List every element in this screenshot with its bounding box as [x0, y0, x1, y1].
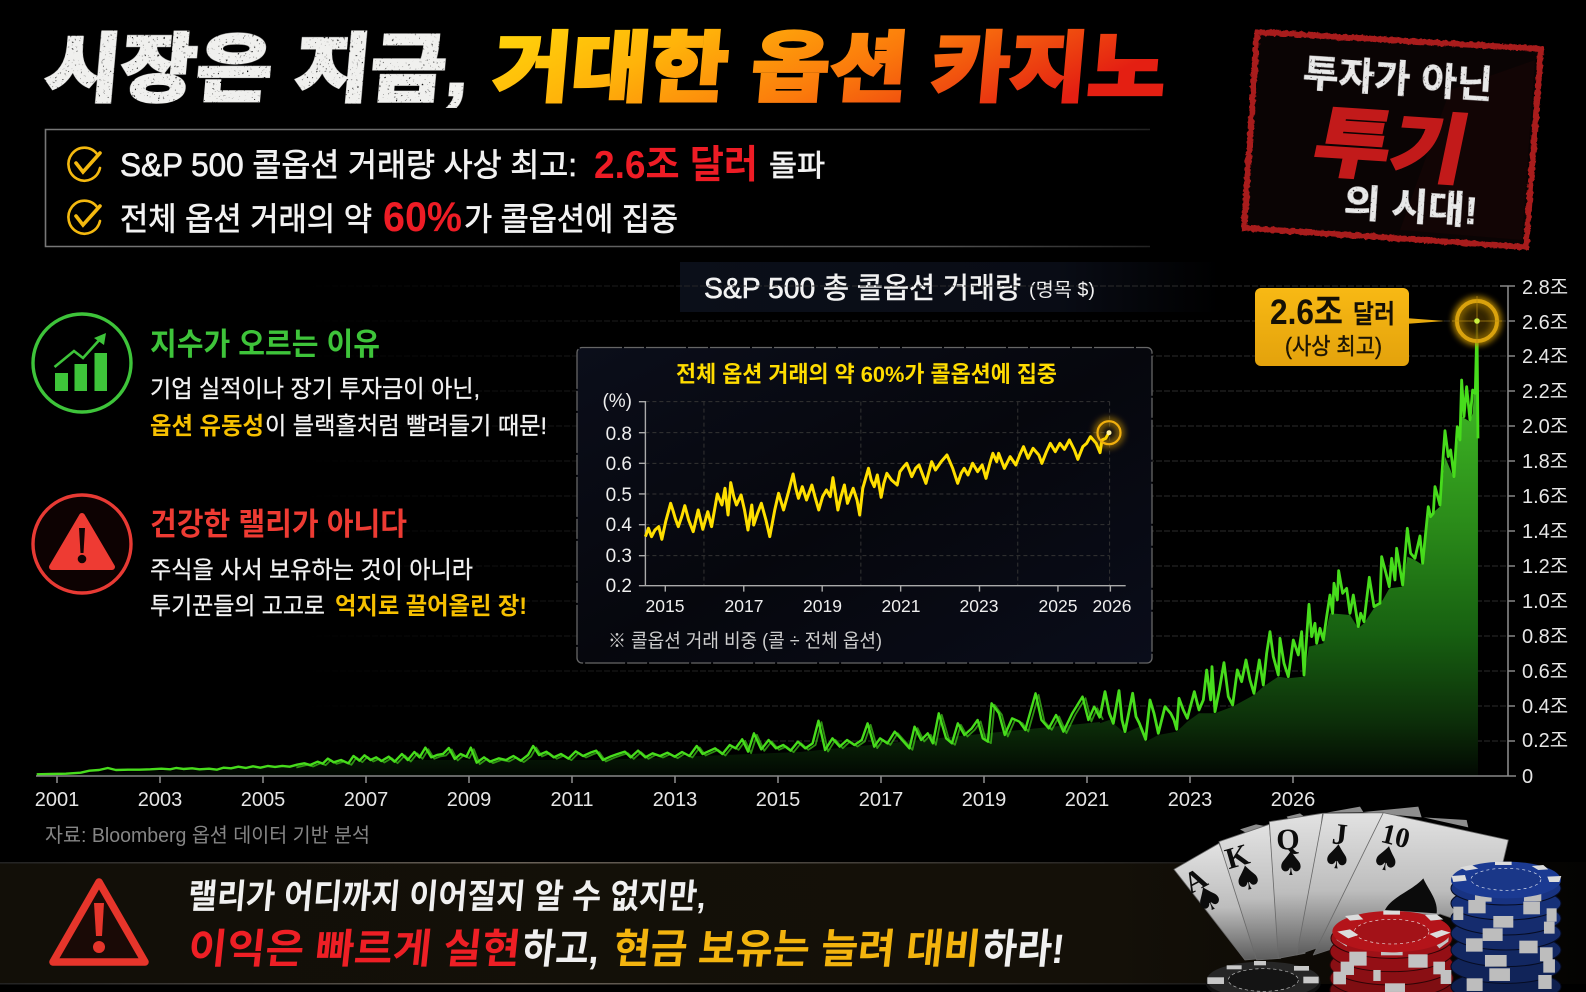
- bullet 1: 2.6조 달러: [594, 144, 758, 187]
- inset line: [645, 433, 1109, 539]
- playing cards: [1174, 807, 1508, 960]
- source: 자료: Bloomberg 옵션 데이터 기반 분석: [45, 824, 370, 847]
- playing cards: 10: [1378, 818, 1413, 855]
- inset x labels: 2023: [960, 596, 998, 616]
- bullet 2: 전체 옵션 거래의 약: [120, 201, 372, 237]
- x axis: [35, 776, 1516, 811]
- y axis: 0.6조: [1522, 661, 1568, 683]
- y axis: 2.6조: [1522, 312, 1568, 334]
- inset x labels: 2025: [1039, 596, 1077, 616]
- summary box: [46, 130, 1150, 246]
- inset y labels: 0.3: [606, 546, 632, 567]
- inset highlight ring: [1098, 421, 1120, 444]
- line: left part: [37, 693, 1103, 774]
- stamp line 1: 투자가 아닌: [1302, 53, 1494, 107]
- y axis: [1500, 277, 1568, 788]
- y axis: 2.2조: [1522, 381, 1568, 403]
- illustration: cards and chips: [1174, 807, 1561, 992]
- icon: check 2: [68, 201, 100, 234]
- y axis: 0.4조: [1522, 696, 1568, 718]
- black chip: [1206, 961, 1321, 992]
- bullet 2: [120, 193, 678, 240]
- playing cards: K: [1222, 838, 1254, 876]
- x axis: 2007: [344, 789, 388, 811]
- y axis: 1.8조: [1522, 451, 1568, 473]
- x axis: 2013: [653, 789, 697, 811]
- block: not a healthy rally: [33, 495, 527, 620]
- inset y labels: (%): [602, 391, 632, 412]
- playing cards: A: [1178, 861, 1213, 901]
- callout: peak value: 달러: [1353, 299, 1395, 329]
- inset y labels: 0.8: [606, 424, 632, 445]
- stamp: [1242, 29, 1543, 250]
- y axis: 1.2조: [1522, 556, 1568, 578]
- y axis: 2.4조: [1522, 346, 1568, 368]
- x axis: 2021: [1065, 789, 1109, 811]
- x axis: 2001: [35, 789, 79, 811]
- playing cards: Q: [1276, 823, 1300, 857]
- callout: peak value: [1255, 288, 1445, 366]
- title: gradient part: 거대한 옵션 카지노: [490, 26, 1170, 112]
- playing cards: ♠: [1276, 844, 1306, 883]
- title: [42, 26, 1170, 112]
- y axis: 2.8조: [1522, 277, 1568, 299]
- icon: check 1: [68, 148, 100, 181]
- icon: warning circle: [33, 495, 131, 593]
- x axis: 2003: [138, 789, 182, 811]
- heading: 지수가 오르는 이유: [150, 327, 380, 362]
- line: right part: [1100, 321, 1478, 739]
- body: 이 블랙홀처럼 빨려들기 때문!: [265, 413, 547, 440]
- area fill: left: [37, 722, 1100, 776]
- stamp line 3: 의 시대!: [1343, 183, 1479, 233]
- inset y labels: 0.2: [606, 576, 632, 597]
- y axis: 1.6조: [1522, 486, 1568, 508]
- inset x labels: 2019: [803, 596, 842, 616]
- stamp big word: 투기: [1307, 101, 1476, 195]
- x axis: 2015: [756, 789, 800, 811]
- chart subtitle: [680, 262, 1220, 312]
- blue chips: [1451, 862, 1561, 992]
- body: [150, 557, 527, 620]
- playing cards: ♠: [1368, 837, 1405, 881]
- y axis: 2.0조: [1522, 416, 1568, 438]
- heading: 건강한 랠리가 아니다: [150, 507, 407, 542]
- bullet 1: 돌파: [769, 150, 825, 183]
- block: why index rises: [33, 314, 547, 440]
- inset grid and axes: [639, 402, 1126, 592]
- body: 옵션 유동성: [150, 413, 264, 440]
- callout: peak value: (사상 최고): [1285, 333, 1382, 359]
- inset title: 전체 옵션 거래의 약 60%가 콜옵션에 집중: [676, 362, 1057, 387]
- bullet 2: 가 콜옵션에 집중: [464, 201, 678, 237]
- banner line 2: 현금 보유는 늘려 대비: [611, 926, 983, 972]
- banner line 2: 이익은 빠르게 실현: [186, 926, 523, 972]
- y axis: 0.2조: [1522, 730, 1568, 752]
- body: 투기꾼들의 고고로: [150, 593, 325, 620]
- red chips: [1330, 911, 1453, 992]
- title: white part: 시장은 지금,: [42, 27, 473, 111]
- bullet 1: S&P 500 콜옵션 거래량 사상 최고:: [120, 147, 577, 183]
- x axis: 2009: [447, 789, 491, 811]
- body: 억지로 끌어올린 장!: [335, 593, 527, 620]
- inset x labels: 2015: [646, 596, 684, 616]
- x axis: 2026: [1271, 789, 1315, 811]
- x axis: 2005: [241, 789, 285, 811]
- bullet 1: [120, 144, 825, 187]
- chart subtitle: (명목 $): [1029, 279, 1095, 301]
- inset x labels: 2026: [1093, 596, 1131, 616]
- inset y labels: 0.5: [606, 485, 632, 506]
- banner line 2: 하라!: [980, 926, 1067, 972]
- playing cards: ♠: [1320, 836, 1354, 878]
- bullet 2: 60%: [383, 193, 462, 240]
- banner line 1: 랠리가 어디까지 이어질지 알 수 없지만,: [186, 878, 708, 916]
- body: [150, 376, 547, 440]
- area fill: right: [1100, 347, 1478, 776]
- x axis: 2011: [550, 789, 594, 811]
- y axis: 1.0조: [1522, 591, 1568, 613]
- inset x labels: [646, 596, 1131, 616]
- x axis: 2017: [859, 789, 903, 811]
- chart subtitle: S&P 500 총 콜옵션 거래량: [704, 273, 1021, 305]
- x axis: 2019: [962, 789, 1006, 811]
- banner: [0, 862, 1586, 984]
- icon: warning triangle: [53, 882, 145, 962]
- playing cards: ♠: [1187, 875, 1230, 923]
- inset x labels: 2017: [725, 596, 763, 616]
- inset x labels: 2021: [882, 596, 920, 616]
- inset y labels: 0.6: [606, 454, 632, 475]
- body: 기업 실적이나 장기 투자금이 아닌,: [150, 376, 480, 403]
- main chart: [35, 277, 1568, 811]
- banner line 2: 하고,: [520, 926, 602, 972]
- x axis: 2023: [1168, 789, 1212, 811]
- peak marker: [1452, 296, 1502, 346]
- icon: growth chart: [33, 314, 131, 412]
- inset y labels: [602, 391, 632, 597]
- y axis: 1.4조: [1522, 521, 1568, 543]
- playing cards: ♠: [1229, 856, 1266, 900]
- body: 주식을 사서 보유하는 것이 아니라: [150, 557, 473, 584]
- playing cards: J: [1330, 817, 1349, 852]
- inset y labels: 0.4: [606, 515, 632, 536]
- banner line 2: [186, 926, 1067, 972]
- inset note: ※ 콜옵션 거래 비중 (콜 ÷ 전체 옵션): [608, 630, 882, 652]
- panel: inset chart: [577, 348, 1152, 663]
- y axis: 0: [1522, 766, 1533, 788]
- callout: peak value: 2.6조: [1270, 293, 1343, 332]
- y axis: 0.8조: [1522, 626, 1568, 648]
